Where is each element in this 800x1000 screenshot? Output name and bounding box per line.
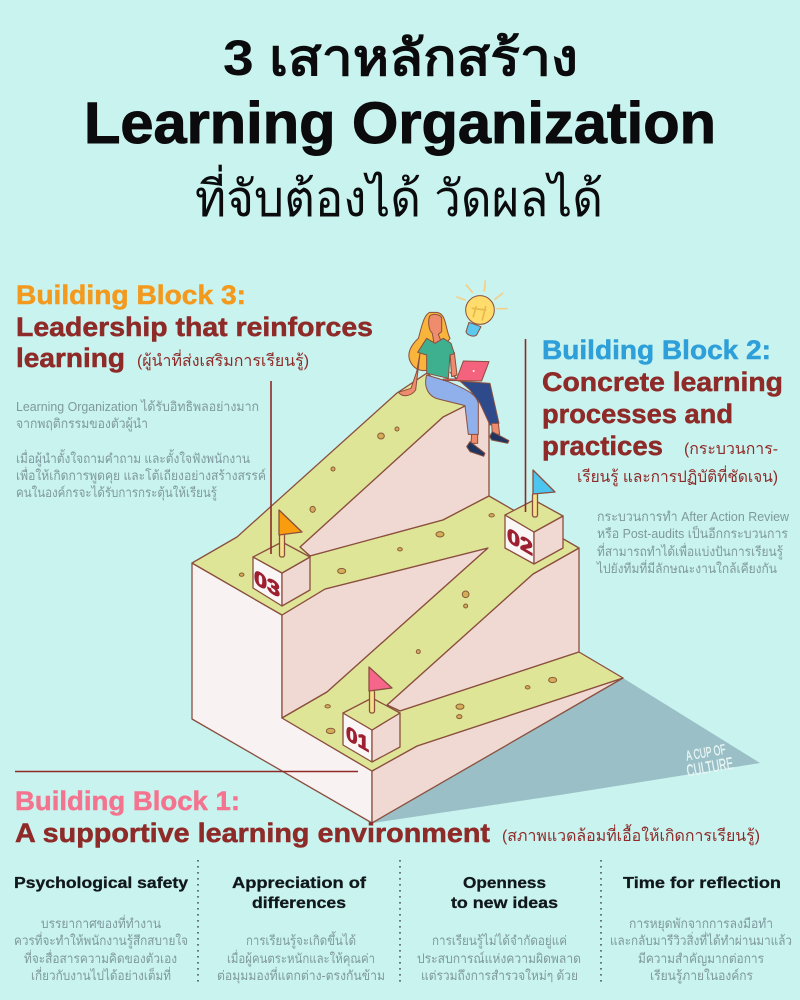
shoes xyxy=(467,442,485,456)
staircase illustration xyxy=(192,373,760,823)
column: appreciation of differences: การเรียนรู้จะเกิดขึ้นได้ xyxy=(246,931,356,949)
upper wall xyxy=(300,395,489,556)
near leg xyxy=(426,375,478,434)
Building Block 2 heading: Building Block 2: xyxy=(542,335,771,365)
Building Block 1 heading: (สภาพแวดล้อมที่เอื้อให้เกิดการเรียนรู้) xyxy=(502,824,760,846)
block 01 xyxy=(343,698,400,762)
column: time for reflection: Time for reflection xyxy=(623,875,781,892)
column: appreciation of differences xyxy=(217,875,385,984)
Building Block 2 heading: เรียนรู้ และการปฏิบัติที่ชัดเจน) xyxy=(577,465,778,487)
Building Block 3 heading: Building Block 3: xyxy=(16,280,246,310)
column: appreciation of differences: เมื่อผู้คนตระหนักและให้คุณค่า xyxy=(227,950,375,967)
column: time for reflection: เรียนรู้ภายในองค์กร xyxy=(650,968,753,984)
column: openness to new ideas: แต่รวมถึงการสำรวจใหม่ๆ ด้วย xyxy=(421,968,578,983)
lower right wall xyxy=(372,678,623,823)
white left face xyxy=(192,563,372,823)
column: time for reflection xyxy=(610,875,792,984)
block 01: 01 xyxy=(346,720,369,757)
leader lines xyxy=(15,339,526,772)
hair xyxy=(409,312,450,371)
block 03 xyxy=(253,542,310,606)
woman with laptop and light bulb xyxy=(398,281,509,456)
Building Block 3 heading: (ผู้นำที่ส่งเสริมการเรียนรู้) xyxy=(137,349,309,371)
column: psychological safety: ที่จะสื่อสารความคิดของตัวเอง xyxy=(24,950,177,966)
Building Block 1 heading xyxy=(15,786,760,848)
laptop xyxy=(443,361,489,381)
column: psychological safety xyxy=(14,875,188,983)
Building Block 2 description xyxy=(596,509,790,576)
Building Block 2 description: ที่สามารถทำได้เพื่อแบ่งปันการเรียนรู้ xyxy=(597,543,783,560)
green winding path xyxy=(192,373,623,771)
shirt xyxy=(418,338,454,378)
Building Block 1 heading: A supportive learning environment xyxy=(15,818,490,848)
block 03: 03 xyxy=(254,564,280,603)
title xyxy=(84,30,716,227)
Building Block 3 heading: Leadership that reinforces xyxy=(16,312,373,342)
Building Block 3 description: เพื่อให้เกิดการพูดคุย และโต้เถียงอย่างสร้างสรรค์ xyxy=(16,467,266,484)
column: appreciation of differences: differences xyxy=(252,895,346,912)
column: openness to new ideas: ประสบการณ์แห่งความผิดพลาด xyxy=(417,951,581,966)
Building Block 2 heading xyxy=(542,335,783,487)
Building Block 3 description: จากพฤติกรรมของตัวผู้นำ xyxy=(16,416,148,432)
block 02: 02 xyxy=(507,522,533,561)
column: openness to new ideas: Openness xyxy=(463,875,546,892)
column: time for reflection: มีความสำคัญมากต่อการ xyxy=(638,951,764,966)
column: openness to new ideas: การเรียนรู้ไม่ได้จำกัดอยู่แค่ xyxy=(432,933,567,949)
middle wall xyxy=(282,548,488,718)
far leg xyxy=(450,372,499,425)
column: time for reflection: การหยุดพักจากการลงมือทำ xyxy=(629,916,773,932)
flag 02 xyxy=(532,470,555,517)
title: 3 เสาหลักสร้าง xyxy=(223,30,578,86)
Building Block 1 heading: Building Block 1: xyxy=(15,786,240,816)
Building Block 3 heading xyxy=(16,280,373,373)
Building Block 2 description: ไปยังทีมที่มีลักษณะงานใกล้เคียงกัน xyxy=(596,560,777,576)
column: openness to new ideas xyxy=(417,875,581,983)
path pebbles xyxy=(239,427,557,734)
Building Block 2 heading: (กระบวนการ- xyxy=(684,441,778,458)
skin: arms, neck, face xyxy=(429,314,442,346)
column: appreciation of differences: Appreciation of xyxy=(232,875,367,892)
bulb xyxy=(457,281,507,336)
Building Block 2 heading: processes and xyxy=(542,399,733,429)
column: psychological safety: Psychological safety xyxy=(14,875,188,892)
right wall xyxy=(387,548,579,711)
flag 03 xyxy=(279,510,302,557)
column dividers xyxy=(198,860,601,985)
watermark: CULTURE xyxy=(685,754,735,781)
column: psychological safety: ควรที่จะทำให้พนักงานรู้สึกสบายใจ xyxy=(14,932,188,949)
title: Learning Organization xyxy=(84,91,716,156)
column: psychological safety: เกี่ยวกับงานไปได้อย่างเต็มที่ xyxy=(31,966,171,983)
flag 01 xyxy=(369,667,392,713)
column: psychological safety: บรรยากาศของที่ทำงาน xyxy=(41,915,161,931)
Building Block 2 description: หรือ Post-audits เป็นอีกกระบวนการ xyxy=(597,524,788,541)
column: openness to new ideas: to new ideas xyxy=(451,895,558,912)
Building Block 3 heading: learning xyxy=(16,343,125,373)
Building Block 2 heading: practices xyxy=(542,431,663,461)
Building Block 2 description: กระบวนการทำ After Action Review xyxy=(597,509,790,524)
Building Block 2 heading: Concrete learning xyxy=(542,367,783,397)
block 02 xyxy=(505,500,563,564)
Building Block 3 description: Learning Organization ได้รับอิทธิพลอย่างมาก xyxy=(16,399,259,414)
watermark: A CUP OF xyxy=(685,741,727,764)
ground shadow xyxy=(373,678,760,823)
title: ที่จับต้องได้ วัดผลได้ xyxy=(195,165,603,227)
Building Block 3 description xyxy=(16,399,266,501)
watermark xyxy=(683,740,735,781)
column: appreciation of differences: ต่อมุมมองที่แตกต่าง-ตรงกันข้าม xyxy=(217,967,385,984)
Building Block 3 description: คนในองค์กรจะได้รับการกระตุ้นให้เรียนรู้ xyxy=(16,485,217,501)
Building Block 3 description: เมื่อผู้นำตั้งใจถามคำถาม และตั้งใจฟังพนักงาน xyxy=(16,449,250,467)
